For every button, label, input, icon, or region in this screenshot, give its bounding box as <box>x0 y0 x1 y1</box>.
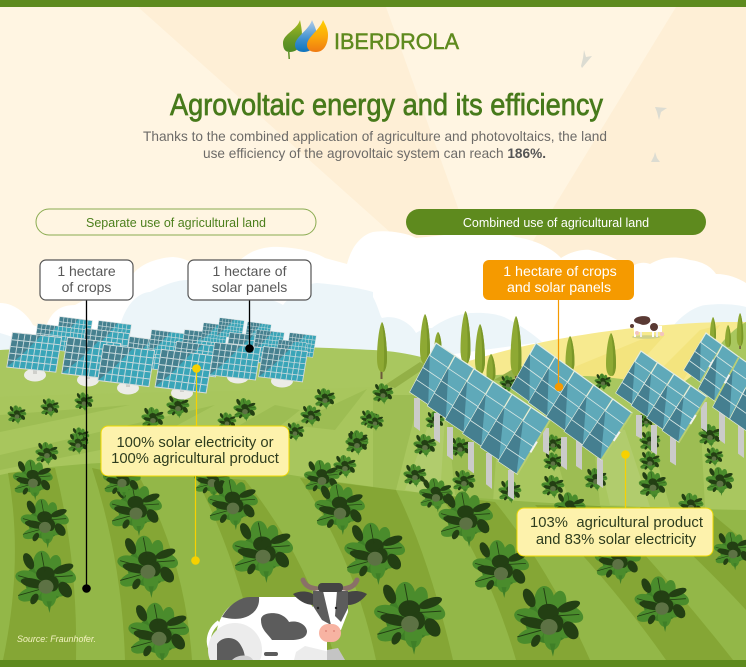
panel row 1 <box>410 343 550 474</box>
combined-use solar panels <box>410 333 746 500</box>
lower field with crop stripes <box>0 462 746 667</box>
callout: 1 hectare of solar panels: 1 hectare of <box>213 263 287 279</box>
callout: combined use result <box>517 508 713 556</box>
callout: 1 hectare of crops and solar panels: and solar panels <box>507 280 611 296</box>
crop plants <box>7 374 746 665</box>
callout: combined use result: and 83% solar electricity <box>536 532 697 548</box>
leader: solar panels <box>245 300 254 353</box>
leader: combined hectare <box>555 300 563 391</box>
upper field stripes <box>0 387 705 508</box>
pill heading: separate use <box>36 209 316 235</box>
callout: 1 hectare of crops: of crops <box>62 279 111 295</box>
white clouds <box>0 231 746 360</box>
callout: 1 hectare of solar panels <box>188 260 311 300</box>
cypress trees <box>377 311 743 381</box>
callout: combined use result: 103% agricultural product <box>530 515 703 531</box>
leader: yellow to field <box>191 474 200 565</box>
title: Agrovoltaic energy and its efficiency <box>170 87 603 122</box>
lighter hill stripes <box>555 325 720 385</box>
callout: 1 hectare of crops: 1 hectare <box>57 263 116 279</box>
callout: separate use result: 100% agricultural product <box>111 451 279 467</box>
pill heading: separate use: Separate use of agricultural land <box>86 216 266 230</box>
callout: 1 hectare of crops and solar panels: 1 hectare of crops <box>503 264 617 280</box>
yellow distant hill <box>440 322 746 400</box>
birds <box>581 50 667 162</box>
blue clouds in front <box>0 280 746 365</box>
top bar <box>0 0 746 7</box>
logo icon: leaf and drops <box>283 20 328 59</box>
pill heading: combined use <box>406 209 706 235</box>
green hills <box>0 322 746 667</box>
logo wordmark: IBERDROLA <box>334 29 459 54</box>
tree shadows <box>385 362 528 388</box>
panel row 5 <box>713 357 746 431</box>
callout: 1 hectare of crops <box>40 260 133 300</box>
foreground cow <box>208 580 367 667</box>
leader: crops <box>82 300 91 593</box>
separate-use solar panels <box>6 316 317 400</box>
callout: separate use result: 100% solar electricity or <box>116 435 274 451</box>
small distant cow <box>630 316 664 339</box>
panel row 3 <box>616 351 707 442</box>
subtitle: use efficiency of the agrovoltaic system can reach 186%. <box>203 145 546 161</box>
panel row 4 <box>684 333 739 401</box>
source note: Source: Fraunhofer. <box>17 634 96 645</box>
bottom bar <box>0 660 746 667</box>
callout: separate use result <box>101 426 289 476</box>
pill heading: combined use: Combined use of agricultural land <box>463 216 649 230</box>
callout: 1 hectare of solar panels: solar panels <box>212 279 287 295</box>
logo: Iberdrola <box>283 20 459 59</box>
callout: 1 hectare of crops and solar panels <box>483 260 634 300</box>
panel supports <box>414 398 744 500</box>
panel row 2 <box>511 343 632 460</box>
subtitle <box>143 128 607 161</box>
leader: yellow from panels <box>192 364 201 428</box>
subtitle: Thanks to the combined application of agriculture and photovoltaics, the land <box>143 128 607 144</box>
leader: combined result <box>621 450 630 510</box>
